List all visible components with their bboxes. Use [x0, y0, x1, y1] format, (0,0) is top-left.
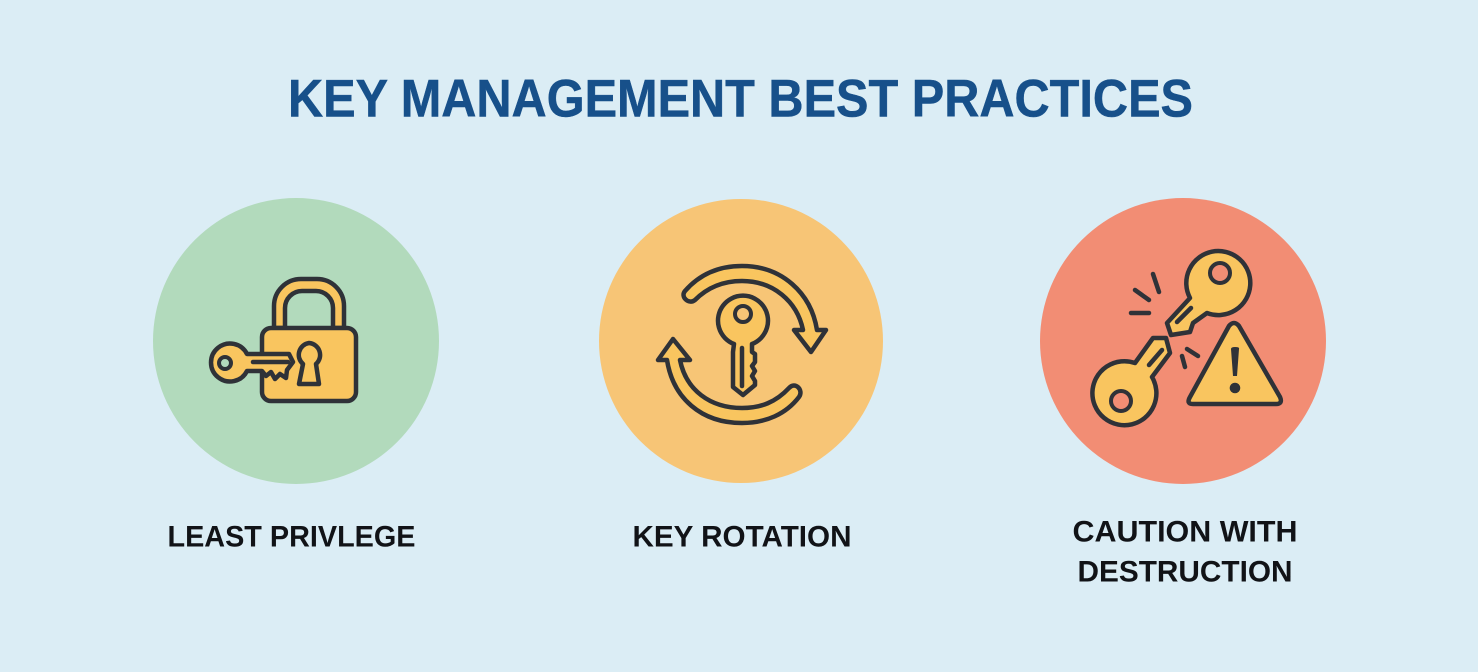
label: key rotation: KEY ROTATION: [632, 520, 852, 554]
label: caution with destruction: DESTRUCTION: [1078, 556, 1292, 588]
panel: key rotation: [599, 199, 883, 554]
title: KEY MANAGEMENT BEST PRACTICES: [288, 70, 1193, 128]
icon: broken key and warning: [1092, 251, 1281, 425]
panel: least privilege: [153, 198, 439, 554]
icon: padlock with key: [211, 279, 356, 401]
panel: caution with destruction: [1040, 198, 1326, 588]
label: caution with destruction: CAUTION WITH: [1072, 516, 1298, 548]
label: caution with destruction: [1072, 516, 1298, 588]
orange circle: [599, 199, 883, 483]
green circle: [153, 198, 439, 484]
icon: rotating arrows and key: [658, 266, 826, 423]
red circle: [1040, 198, 1326, 484]
label: least privilege: LEAST PRIVLEGE: [168, 520, 416, 554]
